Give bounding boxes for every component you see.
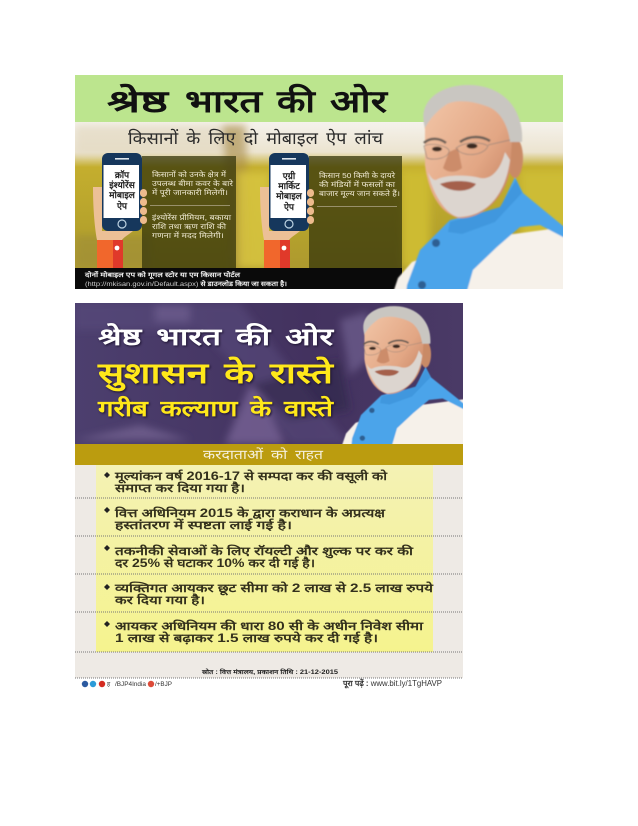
item 1: मूल्यांकन वर्ष 2016-17 से सम्पदा कर की वसूली को xyxy=(114,469,388,484)
title: की xyxy=(276,83,316,119)
source line: स्रोत : वित्त मंत्रालय, प्रकाशन तिथि : 21-12-2015 xyxy=(201,668,339,676)
text: agri market point xyxy=(319,171,400,199)
item 2: हस्तांतरण में स्पष्टता लाई गई है। xyxy=(114,518,292,532)
gold heading band xyxy=(75,444,463,465)
text: crop insurance point one: उपलब्ध बीमा कवर के बारे xyxy=(152,179,234,188)
social icons and handle: /+BJP xyxy=(155,682,172,688)
body background xyxy=(75,465,463,678)
title: ओर xyxy=(330,83,389,119)
icon: hand holding agri market phone: मोबाइल xyxy=(275,190,303,201)
list of tax reliefs xyxy=(104,469,435,645)
text: agri market point: किसान 50 किमी के दायरे xyxy=(319,171,396,180)
black download strip xyxy=(75,268,402,289)
icon: hand holding agri market phone: मार्किट xyxy=(277,180,300,191)
text: crop insurance point two: राशि तथा ऋण राशि की xyxy=(152,222,227,231)
social icons and handle: /BJP4India xyxy=(115,682,147,688)
item 4 xyxy=(104,581,435,607)
item 3 xyxy=(104,544,414,570)
wheat field photo background xyxy=(75,122,563,275)
icon: hand holding agri market phone: ऐप xyxy=(283,201,295,212)
item 2: वित्त अधिनियम 2015 के द्वारा कराधान के अप्रत्यक्ष xyxy=(114,506,386,520)
text: crop insurance point two xyxy=(152,213,232,240)
purple chart background xyxy=(75,303,463,444)
icon: hand holding crop insurance phone: ऐप xyxy=(116,200,128,211)
portrait xyxy=(342,305,463,444)
subtitle: किसानों के लिए दो मोबाइल ऐप लांच xyxy=(128,128,384,148)
gold heading band: करदाताओं को राहत xyxy=(203,447,324,462)
item 2 xyxy=(104,506,386,532)
icon: hand holding crop insurance phone: मोबाइल xyxy=(108,189,136,200)
icon: hand holding agri market phone: एग्री xyxy=(282,170,296,181)
icon: hand holding crop insurance phone xyxy=(93,153,147,268)
text: agri market point: की मंडियों में फसलों का xyxy=(319,180,396,189)
item 4: कर दिया गया है। xyxy=(114,593,205,607)
panel: crop insurance info xyxy=(142,156,236,268)
social icons and handle: ह xyxy=(107,682,111,688)
green title banner xyxy=(75,75,563,122)
headline: श्रेष्ठ भारत की ओर xyxy=(98,323,335,351)
icon: hand holding agri market phone xyxy=(260,153,314,268)
text: crop insurance point one xyxy=(152,170,234,198)
item 5: आयकर अधिनियम की धारा 80 सी के अधीन निवेश सीमा xyxy=(115,619,424,633)
infographic panel: mobile apps for farmers xyxy=(75,75,580,305)
item 3: दर 25% से घटाकर 10% कर दी गई है। xyxy=(114,556,315,570)
item 4: व्यक्तिगत आयकर छूट सीमा को 2 लाख से 2.5 लाख रुपये xyxy=(114,581,435,596)
text: crop insurance point one: किसानों को उनके क्षेत्र में xyxy=(152,170,227,179)
item 5 xyxy=(104,619,424,645)
infographic panel: relief to taxpayers xyxy=(75,303,470,689)
text: crop insurance point one: में पूरी जानकारी मिलेगी। xyxy=(152,188,228,198)
text: agri market point: बाजार मूल्य जान सकते हैं। xyxy=(319,189,400,199)
headline: सुशासन के रास्ते xyxy=(97,356,335,392)
read more link: पूरा पढ़ें : www.bit.ly/1TgHAVP xyxy=(342,678,442,689)
text: crop insurance point two: इंश्योरेंस प्रीमियम, बकाया xyxy=(152,213,232,222)
title: भारत xyxy=(185,84,264,119)
dotted dividers xyxy=(75,498,463,678)
item 1: समाप्त कर दिया गया है। xyxy=(114,481,245,495)
item 1 xyxy=(104,469,388,495)
title: श्रेष्ठ xyxy=(107,83,171,119)
headline xyxy=(97,323,335,421)
black download strip: दोनों मोबाइल एप को गूगल स्टोर या एम किसान पोर्टल xyxy=(84,270,241,280)
item 5: 1 लाख से बढ़ाकर 1.5 लाख रुपये कर दी गई है। xyxy=(115,631,378,645)
black download strip: (http://mkisan.gov.in/Default.aspx) से डाउनलोड किया जा सकता है। xyxy=(85,279,287,288)
headline: गरीब कल्याण के वास्ते xyxy=(97,395,335,421)
item 3: तकनीकी सेवाओं के लिए रॉयल्टी और शुल्क पर कर की xyxy=(114,544,414,559)
panel: agri market info xyxy=(309,156,402,268)
icon: hand holding crop insurance phone: क्रॉप xyxy=(114,169,130,180)
icon: hand holding crop insurance phone: इंश्योरेंस xyxy=(108,179,136,190)
title xyxy=(107,83,389,119)
social icons and handle xyxy=(82,681,172,688)
text: crop insurance point two: गणना में मदद मिलेगी। xyxy=(152,231,224,240)
portrait xyxy=(393,84,563,289)
